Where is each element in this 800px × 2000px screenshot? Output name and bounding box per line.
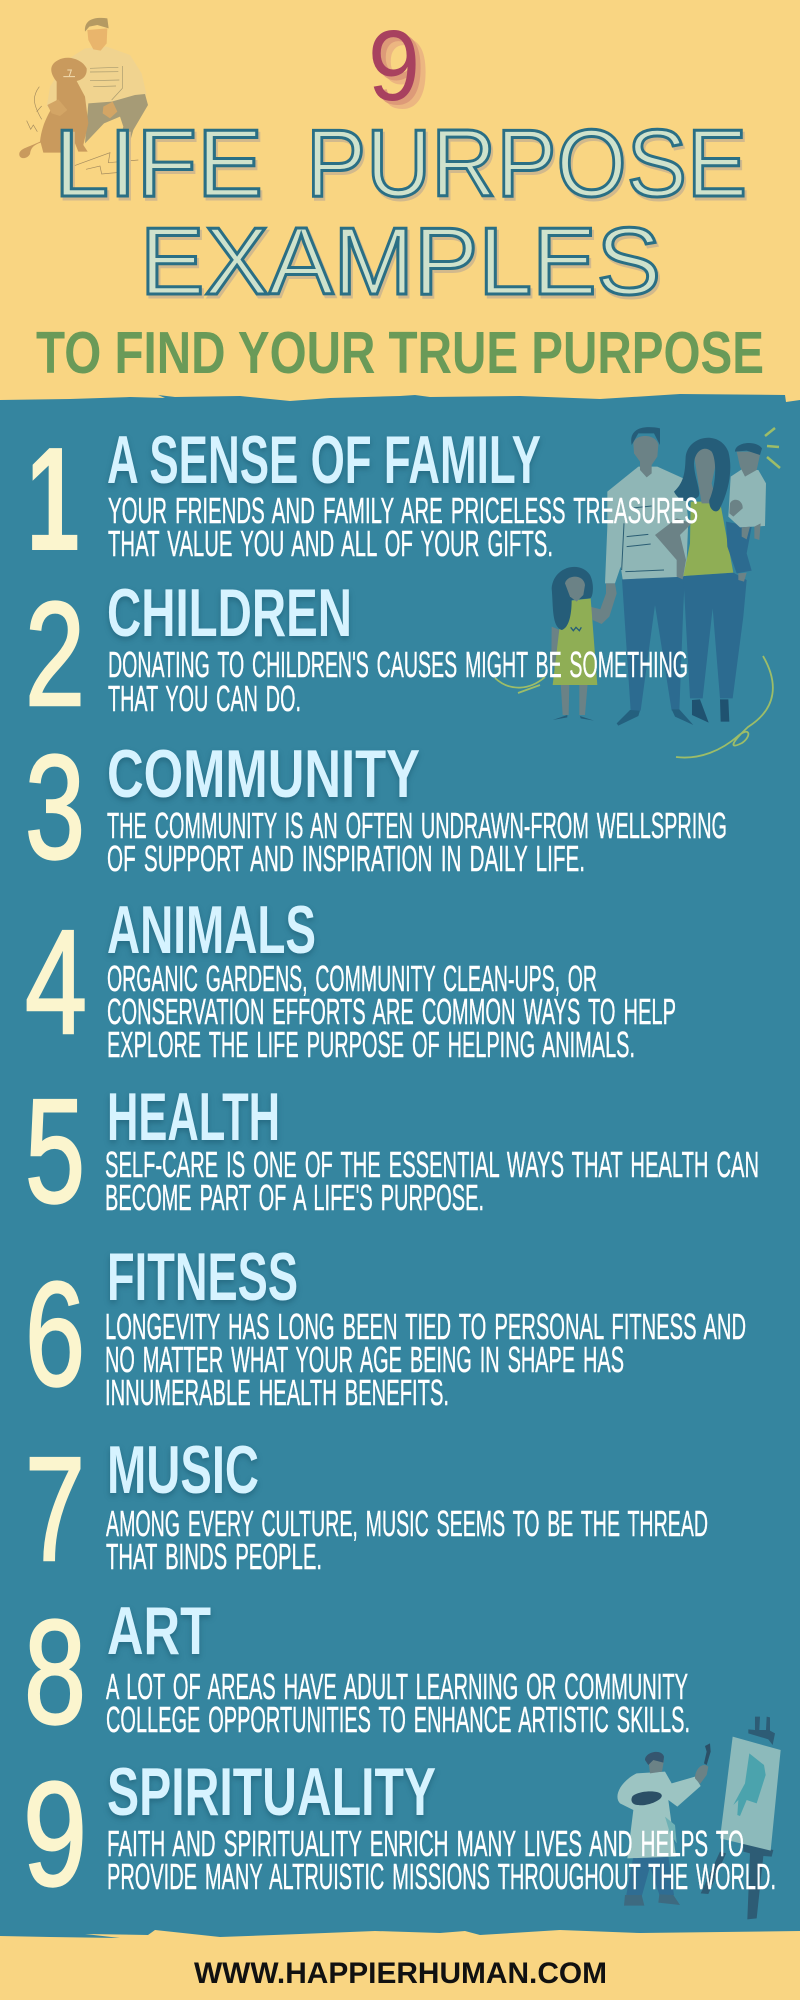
heading: ART: [107, 1593, 211, 1669]
description: [107, 1823, 776, 1897]
description: [107, 958, 676, 1065]
item 2: children: [25, 572, 688, 737]
item 7: music: [25, 1427, 708, 1592]
item 8: art: [24, 1590, 690, 1755]
dog: [19, 58, 117, 158]
description: THAT YOU CAN DO.: [108, 678, 301, 719]
number 8: 8: [24, 1590, 86, 1755]
number 6: 6: [25, 1252, 85, 1417]
item 6: fitness: [25, 1239, 746, 1417]
description: [106, 1503, 708, 1577]
description: [105, 1306, 746, 1413]
heading: A SENSE OF FAMILY: [107, 422, 541, 498]
description: [107, 805, 727, 879]
number 2: 2: [25, 572, 85, 737]
item 4: animals: [25, 892, 676, 1065]
illustration: painter and easel: [617, 1717, 781, 1919]
item 9: spirituality: [23, 1752, 776, 1917]
number 3: 3: [25, 725, 85, 890]
item 1: a sense of family: [26, 417, 698, 582]
heading: CHILDREN: [107, 575, 352, 651]
description: [106, 1666, 690, 1740]
man's sweater: [47, 47, 147, 117]
heading: ANIMALS: [107, 892, 316, 968]
description: [108, 644, 688, 719]
shirt lines: [90, 66, 122, 100]
heading: COMMUNITY: [107, 736, 420, 812]
dog face: [63, 70, 75, 77]
girl: [551, 567, 617, 721]
numeral 9 in title: 9: [368, 10, 420, 122]
description: BECOME PART OF A LIFE'S PURPOSE.: [105, 1177, 484, 1218]
heading: FITNESS: [107, 1239, 298, 1315]
easel: [701, 1717, 781, 1919]
decorative squiggles around family: [495, 428, 780, 758]
description: [108, 490, 698, 564]
number 5: 5: [25, 1069, 85, 1234]
illustration: family: [551, 427, 766, 726]
footer website: WWW.HAPPIERHUMAN.COM: [194, 1957, 607, 1990]
item 3: community: [25, 725, 727, 890]
number 4: 4: [25, 900, 87, 1065]
number 1: 1: [26, 417, 80, 582]
number 7: 7: [25, 1427, 85, 1592]
title line: LIFE PURPOSE: PURPOSE: [306, 110, 747, 217]
teal torn-edge content band: [0, 394, 800, 1938]
number 9: 9: [23, 1752, 87, 1917]
description: THAT BINDS PEOPLE.: [106, 1536, 322, 1577]
title line: EXAMPLES: EXAMPLES: [140, 208, 661, 315]
heading: SPIRITUALITY: [107, 1754, 436, 1830]
description: [105, 1144, 759, 1218]
man's trousers: [85, 94, 148, 147]
heading: MUSIC: [107, 1432, 259, 1508]
boy on mother's arm: [726, 443, 766, 582]
title line: LIFE PURPOSE: LIFE: [54, 110, 263, 217]
painter: [617, 1743, 711, 1906]
father: [600, 427, 693, 726]
mother: [655, 438, 747, 723]
illustration: man with dog: [19, 18, 148, 174]
item 5: health: [25, 1069, 759, 1234]
title line: LIFE PURPOSE: [54, 110, 747, 217]
heading: HEALTH: [107, 1079, 280, 1155]
description: INNUMERABLE HEALTH BENEFITS.: [105, 1372, 449, 1413]
man's head and hair: [85, 18, 109, 51]
motion and ground squiggles: [27, 87, 138, 174]
